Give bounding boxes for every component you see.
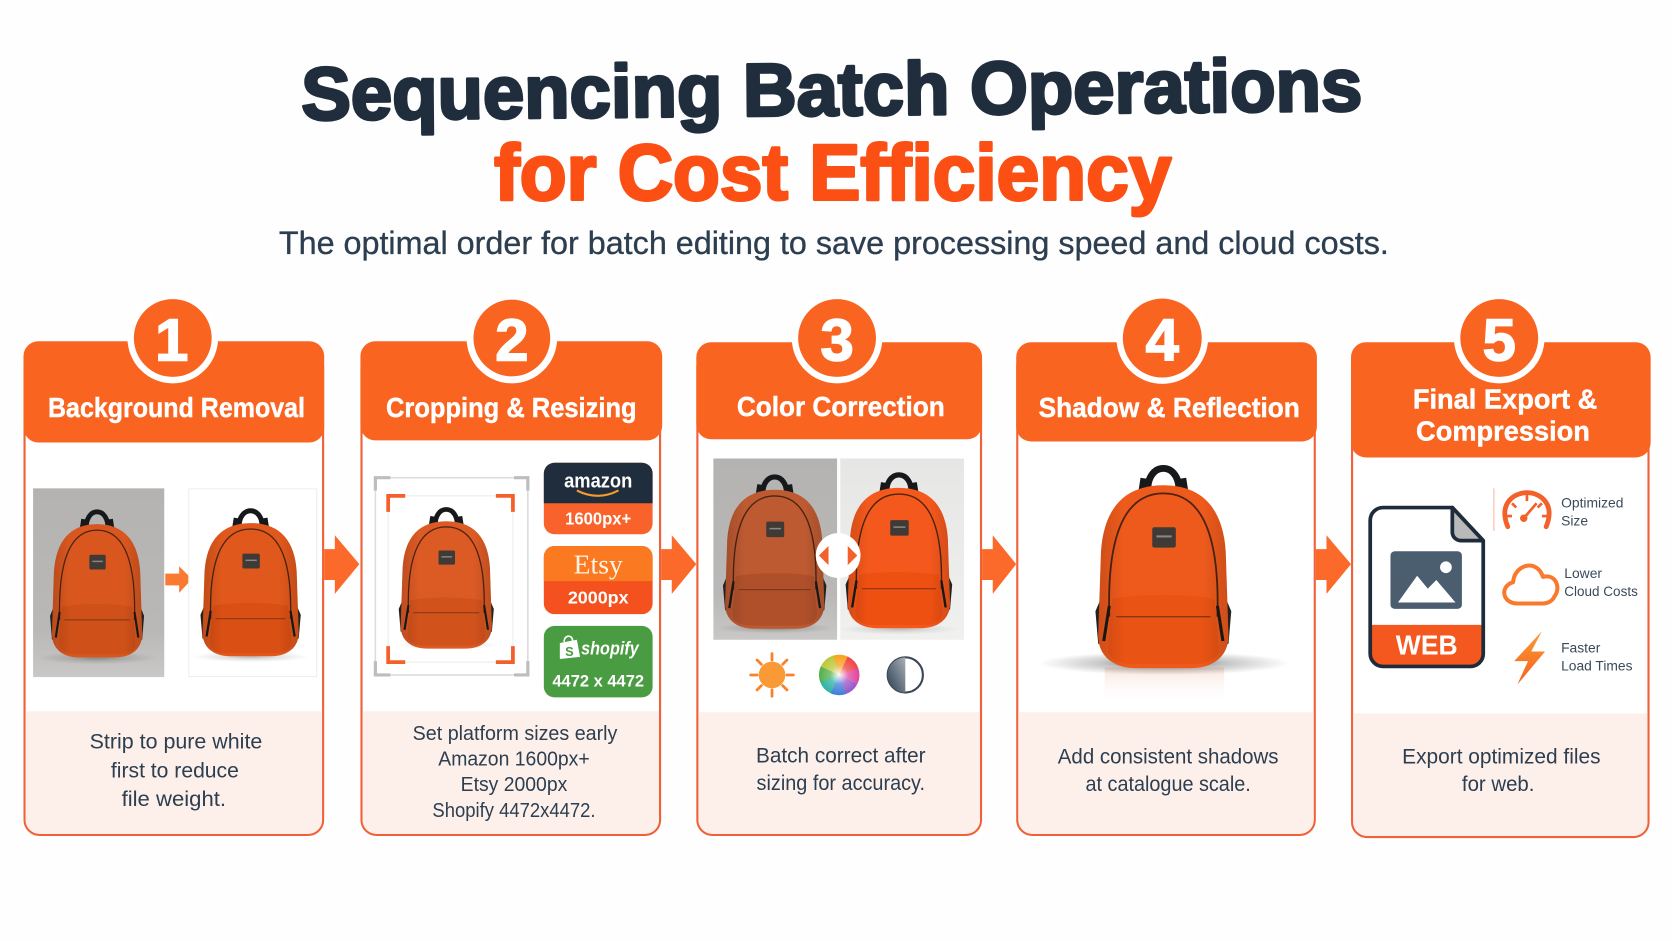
number badge 2: [467, 293, 557, 383]
description panel: for web.: [1462, 772, 1534, 796]
description panel: Batch correct after: [756, 743, 926, 767]
benefit: lower cloud costs: [1504, 565, 1638, 604]
platform card: amazon: 1600px+: [565, 509, 631, 529]
subtitle: The optimal order for batch editing to save processing speed and cloud costs.: [279, 225, 1389, 261]
number badge 1: 1: [155, 306, 188, 373]
icon: contrast: [888, 657, 923, 693]
crop frame with backpack: [375, 478, 528, 675]
description panel: Shopify 4472x4472.: [432, 800, 596, 822]
description panel: [1018, 712, 1314, 834]
ground shadow: [1039, 652, 1290, 675]
after photo: [839, 459, 964, 640]
photo with gray background: [33, 488, 164, 677]
description panel: first to reduce: [111, 758, 239, 782]
number badge 1: [127, 293, 218, 383]
header: Background Removal: [48, 392, 305, 423]
panel: step 5 final export and compression: [1351, 293, 1651, 837]
header: Color Correction: [737, 391, 945, 422]
number badge 5: 5: [1483, 306, 1516, 373]
number badge 3: 3: [820, 306, 854, 373]
arrow: small: [165, 566, 192, 593]
benefit: optimized size: [1494, 488, 1623, 531]
description panel: [1353, 713, 1647, 836]
description panel: [698, 712, 980, 834]
icon: color wheel: [819, 655, 859, 695]
panel: step 4 shadow and reflection: [1016, 292, 1317, 835]
reflection: [1105, 667, 1224, 704]
platform card: amazon: amazon: [564, 470, 632, 492]
platform card: shopify: [544, 626, 653, 697]
title: for Cost Efficiency: [494, 128, 1171, 216]
benefit: faster load times: [1514, 631, 1633, 685]
header: [360, 341, 662, 440]
description panel: Etsy 2000px: [461, 774, 567, 796]
description panel: file weight.: [122, 787, 226, 811]
description panel: Add consistent shadows: [1058, 744, 1279, 768]
platform card: etsy: 2000px: [568, 588, 629, 608]
platform card: etsy: Etsy: [574, 549, 623, 580]
benefit: optimized size: Optimized: [1561, 495, 1623, 511]
arrow: step 2 to 3: [661, 535, 696, 594]
benefit: faster load times: Faster: [1561, 640, 1601, 656]
platform card: shopify: shopify: [581, 639, 640, 659]
arrow: step 3 to 4: [982, 535, 1016, 594]
number badge 4: [1116, 292, 1208, 384]
title: [301, 43, 1363, 216]
icon: WEB file: WEB: [1396, 630, 1458, 661]
number badge 4: 4: [1146, 306, 1179, 373]
icon: sun brightness: [751, 654, 793, 696]
arrow: step 4 to 5: [1316, 535, 1351, 594]
header: [1351, 342, 1651, 457]
description panel: Strip to pure white: [90, 730, 262, 754]
platform card: etsy: [544, 546, 653, 614]
benefit: faster load times: Load Times: [1561, 658, 1633, 674]
number badge 2: 2: [495, 306, 528, 373]
header: Shadow & Reflection: [1039, 392, 1300, 423]
header: [696, 342, 982, 439]
description panel: sizing for accuracy.: [757, 771, 925, 795]
header: Cropping & Resizing: [386, 392, 637, 423]
panel: step 3 color correction: [696, 293, 982, 835]
header: [1016, 342, 1317, 441]
benefit: optimized size: Size: [1561, 513, 1588, 529]
platform card: shopify: 4472 x 4472: [552, 672, 644, 691]
before photo: [713, 459, 837, 640]
benefit: lower cloud costs: Lower: [1564, 565, 1602, 581]
photo on white background: [189, 489, 317, 677]
benefit: lower cloud costs: Cloud Costs: [1564, 583, 1638, 599]
description panel: Set platform sizes early: [413, 723, 618, 745]
arrow: step 1 to 2: [324, 535, 359, 594]
header: Compression: [1416, 415, 1590, 446]
header: Final Export &: [1413, 383, 1597, 414]
description panel: [26, 711, 322, 834]
description panel: Export optimized files: [1402, 744, 1601, 768]
header: [23, 341, 324, 443]
description panel: at catalogue scale.: [1086, 772, 1251, 796]
platform card: amazon: [544, 463, 653, 534]
platform card: shopify: S: [565, 644, 574, 659]
panel: step 2 cropping and resizing: [360, 293, 662, 835]
panel: step 1 background removal: [23, 293, 324, 835]
title: Sequencing Batch Operations: [301, 43, 1363, 136]
number badge 5: [1454, 293, 1545, 383]
icon: WEB file: [1370, 508, 1483, 666]
description panel: [363, 711, 659, 834]
number badge 3: [792, 293, 882, 383]
comparison slider handle: [816, 533, 861, 578]
backpack with shadow: [1095, 468, 1231, 668]
description panel: Amazon 1600px+: [438, 749, 590, 771]
